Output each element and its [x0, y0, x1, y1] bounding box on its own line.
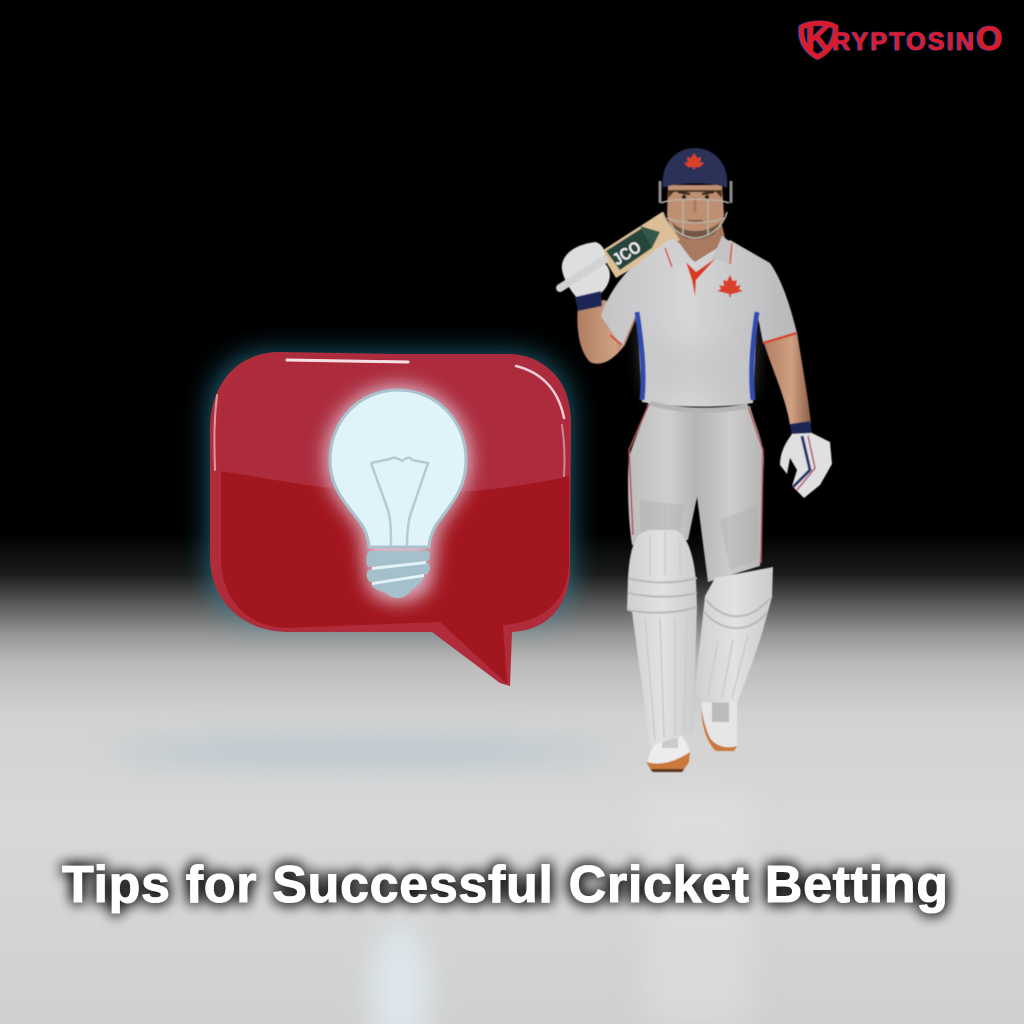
player shirt — [601, 240, 797, 407]
trouser waistband — [650, 403, 748, 410]
cricket bat — [600, 212, 680, 278]
light bulb icon — [330, 390, 466, 598]
left shoe — [646, 730, 690, 772]
player trousers — [628, 403, 764, 582]
left leg pad — [627, 530, 697, 746]
cricket player — [560, 148, 832, 772]
right wristband — [790, 421, 812, 438]
title: Tips for Successful Cricket Betting — [62, 856, 948, 914]
trouser thigh shading — [640, 500, 758, 570]
left wristband — [575, 291, 602, 311]
maple leaf on chest — [717, 275, 743, 297]
right leg pad — [695, 567, 773, 703]
helmet — [663, 148, 727, 188]
bulb halo — [325, 385, 471, 602]
bubble front face — [221, 354, 569, 684]
bulb screw base — [366, 551, 430, 598]
speech bubble with light bulb — [200, 340, 580, 690]
logo: Kryptosino — [802, 20, 1003, 58]
bubble glow — [210, 354, 571, 620]
shirt collar and placket — [665, 236, 732, 296]
right batting glove — [780, 433, 832, 498]
helmet maple leaf — [684, 153, 704, 169]
player neck — [668, 225, 728, 268]
bubble highlights — [214, 360, 565, 476]
shirt side panels and hems — [610, 312, 797, 400]
helmet face grille — [660, 181, 731, 238]
batting glove on bat handle — [562, 242, 610, 299]
player right arm — [763, 332, 811, 425]
player head — [667, 185, 724, 240]
shirt shading — [640, 320, 755, 395]
player left arm — [577, 300, 640, 364]
logo shield — [802, 23, 836, 57]
facial features — [668, 190, 722, 240]
trouser red piping — [629, 404, 763, 563]
cricket bat: JCO — [609, 237, 645, 269]
logo wordmark: KRYPTOSINO — [806, 20, 1003, 58]
bat grip over glove — [560, 260, 604, 288]
bubble side extrusion — [210, 352, 571, 686]
right shoe — [701, 700, 737, 751]
bulb filament — [371, 458, 428, 546]
